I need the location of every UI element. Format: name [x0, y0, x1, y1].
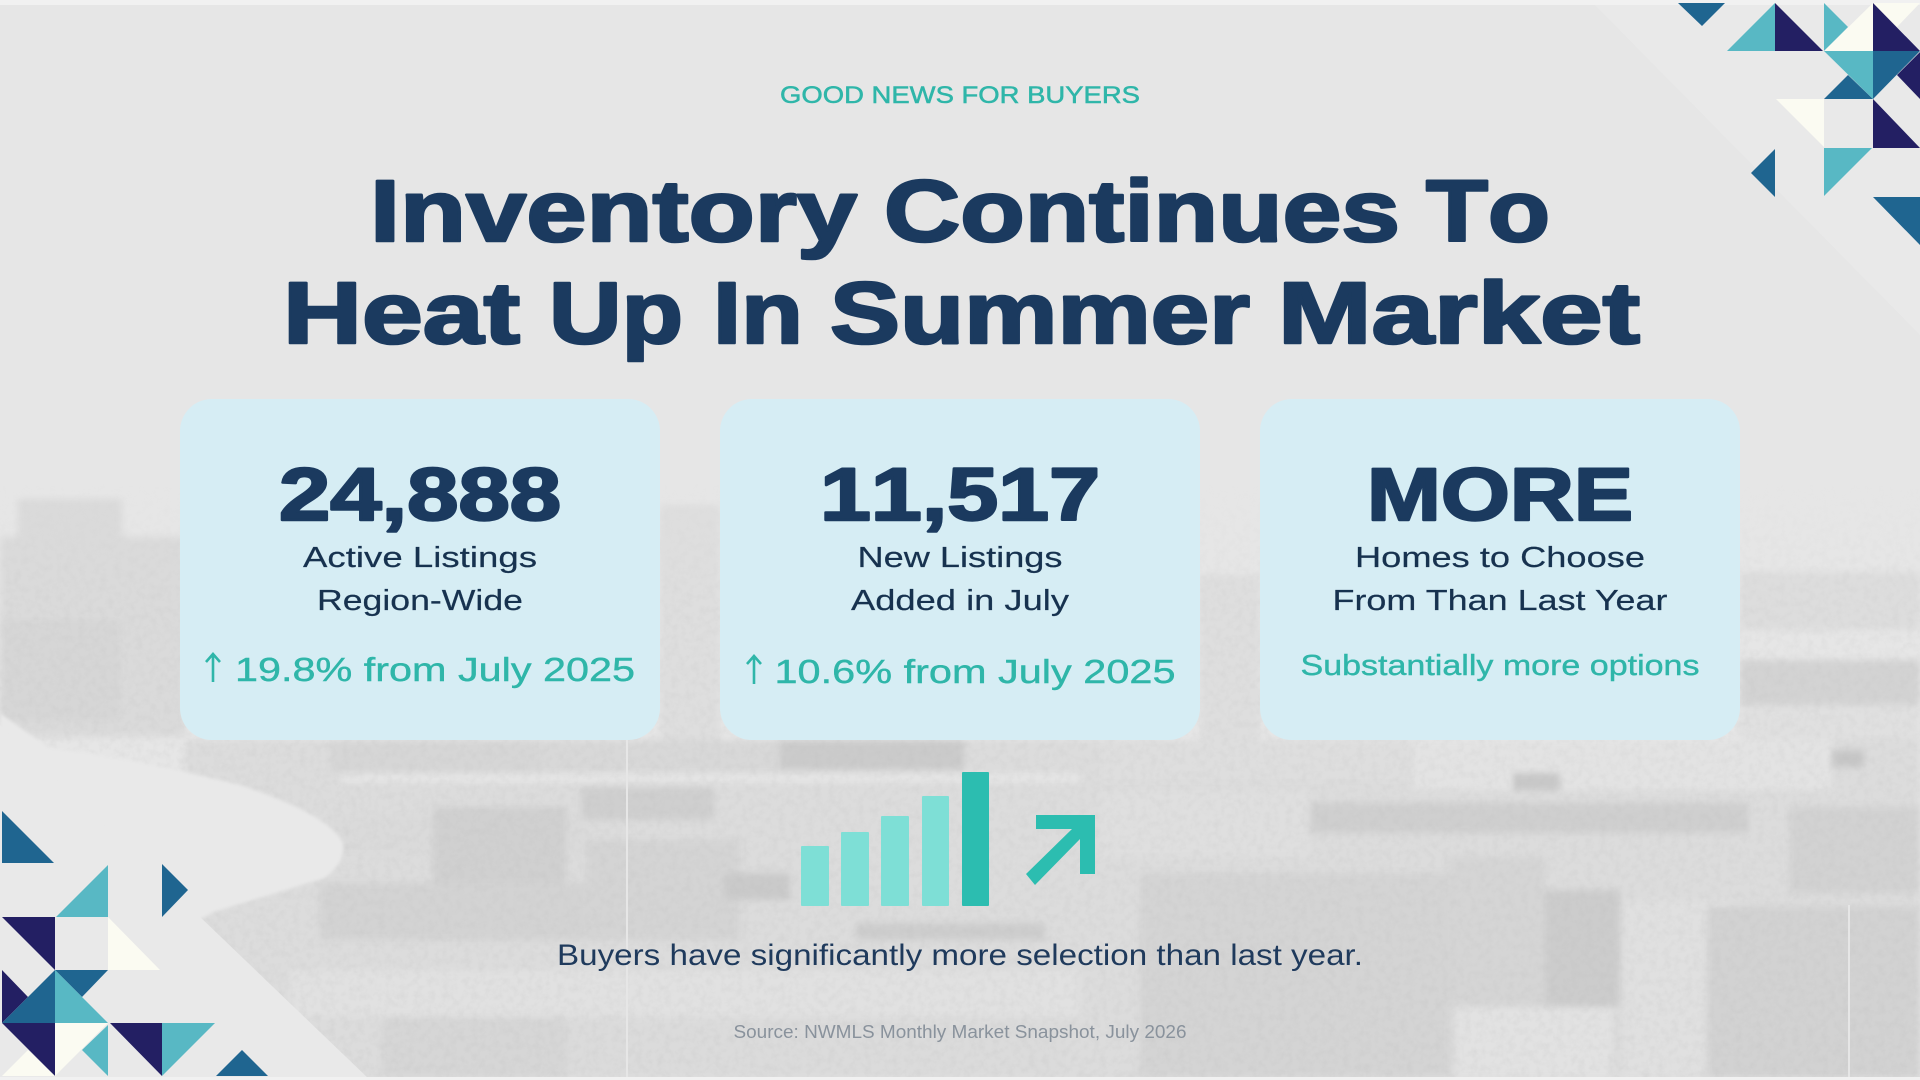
eyebrow heading: GOOD NEWS FOR BUYERS [780, 82, 1140, 109]
new listings number: 11,517 [820, 453, 1100, 536]
more homes label [1332, 542, 1668, 617]
panel: new listings [720, 399, 1200, 740]
more homes label: Homes to Choose [1355, 542, 1645, 574]
stadium dome and lighter corners [0, 713, 343, 1080]
bar chart [801, 772, 989, 906]
bottom-left triangle decoration [2, 811, 268, 1076]
new listings label: Added in July [851, 585, 1070, 617]
active listings number: 24,888 [279, 453, 561, 536]
summary text: Buyers have significantly more selection than last year. [557, 939, 1363, 972]
source note: Source: NWMLS Monthly Market Snapshot, July 2026 [734, 1022, 1186, 1042]
new listings change: 10.6% from July 2025 [774, 653, 1176, 690]
active listings label [303, 542, 537, 617]
title: Continues [884, 163, 1400, 260]
panel: more homes [1260, 399, 1740, 740]
title: Heat [283, 265, 520, 362]
more homes note: Substantially more options [1300, 650, 1700, 682]
active listings label: Region-Wide [317, 585, 523, 617]
title: In [713, 265, 803, 362]
title [283, 163, 1640, 362]
more homes headline: MORE [1367, 453, 1633, 536]
title: Market [1278, 265, 1640, 362]
new listings label: New Listings [858, 542, 1062, 574]
more homes label: From Than Last Year [1332, 585, 1668, 617]
title: Up [549, 265, 683, 362]
title: Summer [830, 265, 1250, 362]
new listings label [851, 542, 1070, 617]
active listings label: Active Listings [303, 542, 537, 574]
title: To [1426, 163, 1550, 260]
active listings change: 19.8% from July 2025 [235, 651, 635, 688]
icon: up-right arrow [1026, 815, 1095, 885]
title: Inventory [370, 163, 857, 260]
top-right triangle decoration [1678, 3, 1920, 245]
panel: active listings [180, 399, 660, 740]
